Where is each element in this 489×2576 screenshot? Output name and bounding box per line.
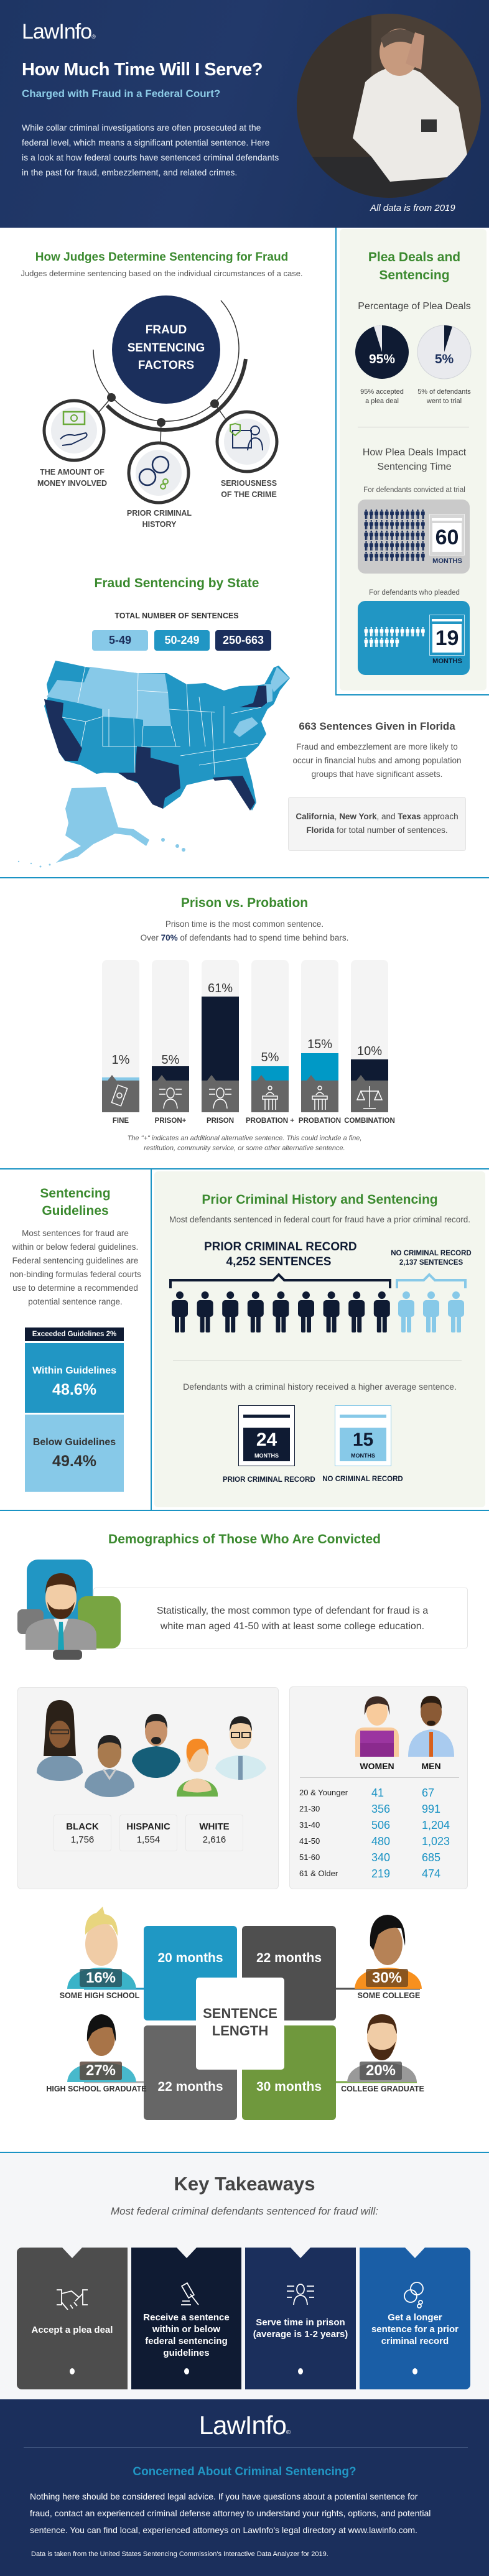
- section: fraud sentencing by state: TOTAL NUMBER OF SENTENCES: [114, 611, 239, 620]
- sentence length by education: 30 months: [256, 2080, 322, 2094]
- card: within guidelines: guidelines: [163, 2348, 210, 2358]
- footnote: restitution, community service, or some other alternative sentence.: [144, 1145, 345, 1152]
- panel: plea deals: For defendants convicted at trial: [363, 486, 465, 494]
- age table: 67: [422, 1787, 434, 1799]
- footer paragraph: sentence. You can find local, experienced attorneys on LawInfo's legal directory at www.lawinfo.com.: [30, 2525, 417, 2535]
- race stat boxes: 1,756: [71, 1834, 94, 1845]
- people pictogram: [169, 1273, 467, 1332]
- pie captions: a plea deal: [365, 398, 399, 405]
- heading: Plea Deals and: [368, 250, 460, 264]
- no record label: NO CRIMINAL RECORD: [391, 1250, 472, 1257]
- card: serve time: Serve time in prison: [256, 2317, 345, 2328]
- panel: race: 1,554: [137, 1834, 160, 1845]
- pie charts: [355, 325, 472, 379]
- race stat boxes: BLACK: [66, 1821, 99, 1832]
- heading: Prison vs. Probation: [181, 896, 308, 910]
- icon: seriousness: [217, 412, 277, 472]
- icon blocks: [102, 1075, 388, 1112]
- age table: 356: [371, 1803, 390, 1815]
- calendar: 24 months: [238, 1405, 295, 1466]
- age table: 480: [371, 1835, 390, 1848]
- age table: 685: [422, 1851, 440, 1864]
- intro paragraph: in the past for fraud, embezzlement, and related crimes.: [22, 167, 237, 177]
- bar chart: PRISON+: [155, 1117, 186, 1125]
- gender avatars: [355, 1696, 454, 1757]
- bar: probation: [301, 960, 338, 1112]
- section: prison vs probation: Over 70% of defendants had to spend time behind bars.: [141, 933, 348, 942]
- legend: [92, 630, 148, 651]
- label: money: THE AMOUNT OF: [40, 468, 105, 477]
- section: prison vs probation: [102, 896, 395, 1152]
- stacked guideline bar: Exceeded Guidelines 2%: [32, 1331, 116, 1338]
- bar: probation+: 5%: [261, 1051, 279, 1064]
- heading: [40, 1186, 111, 1218]
- age table: 219: [371, 1867, 390, 1880]
- subtitle: Charged with Fraud in a Federal Court?: [22, 88, 220, 100]
- card: within guidelines: within or below: [152, 2324, 220, 2335]
- panel: race: 2,616: [203, 1834, 226, 1845]
- bar chart: PROBATION: [299, 1117, 341, 1125]
- age table: 1,204: [422, 1819, 450, 1831]
- section: fraud sentencing by state: 50-249: [164, 634, 200, 646]
- pie charts: 5%: [435, 352, 454, 366]
- heading: Guidelines: [42, 1204, 109, 1218]
- section: fraud sentencing by state: occur in financial hubs and among population: [293, 756, 461, 765]
- note box: California, New York, and Texas approach: [296, 812, 459, 821]
- panel: prior criminal history: Most defendants sentenced in federal court for fraud have a prior criminal record.: [169, 1215, 470, 1224]
- subheading: Judges determine sentencing based on the individual circumstances of a case.: [21, 269, 303, 278]
- panel: prior criminal history: Defendants with a criminal history received a higher average sentence.: [183, 1382, 457, 1392]
- pie charts: 95%: [369, 352, 395, 366]
- card: within guidelines: Receive a sentence: [143, 2312, 230, 2323]
- age table: 31-40: [299, 1820, 320, 1830]
- callout box: [93, 1588, 468, 1648]
- photo circle: [297, 14, 481, 198]
- bar: prison: [202, 960, 239, 1112]
- section: key takeaways: [0, 2152, 489, 2399]
- panel: sentencing guidelines: Most sentences for fraud are: [22, 1229, 129, 1238]
- bar: combination: [351, 960, 388, 1112]
- section: fraud sentencing by state: Fraud and embezzlement are more likely to: [296, 742, 458, 751]
- badges: [80, 1969, 122, 1987]
- footer paragraph: Nothing here should be considered legal advice. If you have questions about a potential sentence for: [30, 2491, 417, 2501]
- heading: Sentencing: [379, 268, 450, 282]
- bar: fine: [102, 960, 139, 1112]
- card: longer sentence: criminal record: [381, 2336, 449, 2346]
- panel: sentencing guidelines: [9, 1186, 141, 1492]
- footnote: [128, 1135, 361, 1152]
- section: how judges determine sentencing: [21, 251, 303, 529]
- section: fraud sentencing by state: groups that have significant assets.: [312, 770, 442, 779]
- panel: plea deals: 5% of defendants: [417, 388, 471, 396]
- no record label: [391, 1250, 472, 1267]
- stacked guideline bar: 49.4%: [52, 1453, 96, 1470]
- label: money: MONEY INVOLVED: [37, 479, 107, 488]
- icon: handcuffs: [129, 443, 189, 503]
- bar: fine: 1%: [112, 1053, 129, 1067]
- panel: sentencing guidelines: within or below federal guidelines.: [12, 1242, 138, 1252]
- plea box: MONTHS: [432, 658, 462, 665]
- card: serve time: (average is 1-2 years): [253, 2329, 348, 2340]
- panel: prior criminal history: NO CRIMINAL RECORD: [322, 1476, 403, 1483]
- calendar: 15 months: 15: [353, 1430, 373, 1450]
- footer logo: LawInfo®: [199, 2411, 290, 2440]
- sentence length by education: [46, 1907, 424, 2120]
- label: seriousness: OF THE CRIME: [221, 490, 277, 499]
- sentence length by education: 22 months: [157, 2080, 223, 2094]
- panel: age and gender table: [289, 1686, 468, 1889]
- label: seriousness: SERIOUSNESS: [221, 479, 277, 488]
- age table: 21-30: [299, 1804, 320, 1813]
- age table: 991: [422, 1803, 440, 1815]
- bar: probation: 15%: [307, 1038, 332, 1051]
- label: seriousness: [221, 479, 277, 499]
- section: demographics: white man aged 41-50 with at least some college education.: [161, 1621, 424, 1632]
- florida callout: 663 Sentences Given in Florida: [299, 720, 455, 732]
- panel: sentencing guidelines: non-binding formulas federal courts: [9, 1270, 141, 1279]
- panel: age and gender table: MEN: [421, 1761, 441, 1771]
- footer heading: Concerned About Criminal Sentencing?: [133, 2465, 356, 2478]
- stacked guideline bar: 48.6%: [52, 1381, 96, 1398]
- panel: race: [17, 1687, 279, 1889]
- age table: 41: [371, 1787, 384, 1799]
- calendar: 24 months: 24: [256, 1430, 277, 1450]
- pie captions: 95% accepted: [360, 388, 404, 396]
- age table: 41-50: [299, 1836, 320, 1846]
- sentence length by education: 30%: [372, 1969, 402, 1986]
- intro paragraph: is a look at how federal courts have sentenced criminal defendants: [22, 152, 279, 162]
- sentence length by education: HIGH SCHOOL GRADUATE: [46, 2085, 147, 2093]
- age table: 61 & Older: [299, 1869, 338, 1878]
- card: plea deal: [17, 2248, 128, 2389]
- age table: 20 & Younger: [299, 1788, 348, 1797]
- bar chart: PROBATION +: [246, 1117, 294, 1125]
- footnote: The "+" indicates an additional alternative sentence. This could include a fine,: [128, 1135, 361, 1142]
- intro paragraph: [22, 123, 279, 177]
- stacked guideline bar: Within Guidelines: [32, 1365, 116, 1376]
- card: longer sentence: Get a longer: [388, 2312, 442, 2323]
- age table: 340: [371, 1851, 390, 1864]
- calendar 19: [429, 615, 465, 656]
- panel: sentencing guidelines: use to determine a recommended: [12, 1283, 138, 1293]
- trial box: MONTHS: [432, 557, 462, 565]
- no record label: 2,137 SENTENCES: [399, 1259, 463, 1267]
- note box: Florida for total number of sentences.: [306, 825, 448, 835]
- bar: prison+: 5%: [162, 1053, 179, 1067]
- footer paragraph: fraud, contact an experienced criminal defense attorney to understand your rights, options, and potential: [30, 2508, 431, 2518]
- label: prior history: HISTORY: [142, 520, 176, 529]
- heading: Fraud Sentencing by State: [95, 576, 259, 590]
- sentence length by education: SOME COLLEGE: [358, 1991, 420, 2000]
- center label: [196, 1978, 284, 2070]
- section: fraud sentencing by state: [17, 576, 466, 867]
- intro paragraph: federal level, which means a significant potential sentence. Here: [22, 137, 269, 147]
- label: prior history: [127, 509, 192, 529]
- panel: plea deals: [335, 228, 489, 695]
- stacked guideline bar: Below Guidelines: [33, 1437, 116, 1448]
- subheading: percentage: Percentage of Plea Deals: [358, 301, 471, 312]
- legend: 5-49: [109, 634, 131, 646]
- prior record label: 4,252 SENTENCES: [226, 1255, 331, 1268]
- bar chart: COMBINATION: [344, 1117, 395, 1125]
- card: longer sentence: sentence for a prior: [371, 2324, 459, 2335]
- sentence length by education: COLLEGE GRADUATE: [341, 2085, 424, 2093]
- panel: prior criminal history: PRIOR CRIMINAL RECORD: [223, 1476, 315, 1484]
- pie captions: [360, 388, 404, 405]
- data note: All data is from 2019: [370, 203, 455, 213]
- age table: 1,023: [422, 1835, 450, 1848]
- title: How Much Time Will I Serve?: [22, 60, 263, 80]
- calendar 19: 19: [435, 626, 459, 650]
- panel: prior criminal history: [154, 1171, 485, 1507]
- race avatars: [37, 1700, 266, 1797]
- section: demographics: Statistically, the most common type of defendant for fraud is a: [157, 1606, 428, 1616]
- heading: Key Takeaways: [174, 2173, 315, 2195]
- calendar 60: [429, 514, 465, 556]
- footer paragraph: [30, 2491, 431, 2535]
- age table: 51-60: [299, 1853, 320, 1862]
- prior record label: [204, 1240, 357, 1268]
- section: key takeaways: Most federal criminal defendants sentenced for fraud will:: [111, 2205, 378, 2217]
- bar: combination: 10%: [357, 1044, 382, 1058]
- intro paragraph: While collar criminal investigations are often prosecuted at the: [22, 123, 261, 133]
- card: plea deal: Accept a plea deal: [32, 2325, 113, 2335]
- trial box: [358, 500, 470, 574]
- subheading: impact: How Plea Deals Impact: [363, 447, 466, 458]
- takeaway cards: [17, 2248, 470, 2389]
- heading: [368, 250, 460, 282]
- icon: money: [44, 401, 104, 460]
- center label: LENGTH: [212, 2023, 268, 2039]
- heading: Sentencing: [40, 1186, 111, 1201]
- plea box: [358, 601, 470, 675]
- stacked guideline bar: [25, 1328, 124, 1492]
- factors diagram: SENTENCING: [128, 342, 205, 355]
- education labels: SOME HIGH SCHOOL: [60, 1991, 139, 2000]
- heading: Demographics of Those Who Are Convicted: [108, 1532, 381, 1546]
- badges: 16%: [86, 1969, 116, 1986]
- note box: [288, 797, 466, 851]
- age table: 506: [371, 1819, 390, 1831]
- card: within guidelines: [131, 2248, 241, 2389]
- bar: probation+: [251, 960, 289, 1112]
- icon: typical defendant avatar: [17, 1560, 121, 1660]
- data source: Data is taken from the United States Sentencing Commission's Interactive Data Analyzer for 2019.: [31, 2550, 328, 2558]
- sentence length by education: 27%: [86, 2062, 116, 2079]
- heading: Prior Criminal History and Sentencing: [202, 1193, 438, 1207]
- avatars: [67, 1907, 422, 2083]
- panel: race: HISPANIC: [126, 1821, 170, 1832]
- header: [0, 0, 489, 228]
- panel: plea deals: went to trial: [427, 398, 462, 405]
- section: demographics: [17, 1532, 468, 1660]
- calendar: 24 months: MONTHS: [254, 1453, 279, 1459]
- logo: LawInfo®: [22, 20, 95, 44]
- age table: 474: [422, 1867, 440, 1880]
- US map: [17, 661, 290, 867]
- card: within guidelines: federal sentencing: [145, 2336, 228, 2346]
- sentence length by education: 20 months: [157, 1951, 223, 1965]
- calendar: 15 months: [335, 1405, 391, 1466]
- subheading: impact: [363, 447, 467, 472]
- factors diagram: FACTORS: [138, 359, 194, 372]
- panel: age and gender table: WOMEN: [360, 1761, 394, 1771]
- panel: sentencing guidelines: Federal sentencing guidelines are: [12, 1256, 138, 1265]
- calendar 60: 60: [435, 526, 459, 549]
- bar: prison: 61%: [208, 982, 233, 995]
- panel: sentencing guidelines: potential sentence range.: [28, 1297, 123, 1306]
- section: prison vs probation: Prison time is the most common sentence.: [165, 919, 324, 929]
- bar: prison+: [152, 960, 189, 1112]
- bar labels: FINE: [113, 1117, 129, 1125]
- card: longer sentence: [360, 2248, 470, 2389]
- race stat boxes: [54, 1815, 111, 1851]
- factors diagram: FRAUD: [146, 323, 187, 337]
- panel: race: WHITE: [199, 1821, 230, 1832]
- quadrant boxes: [144, 1926, 237, 2020]
- sentence length by education: 20%: [366, 2062, 396, 2079]
- label: prior history: PRIOR CRIMINAL: [127, 509, 192, 518]
- bar chart: PRISON: [207, 1117, 234, 1125]
- factors diagram: [42, 295, 279, 504]
- bar chart: [102, 960, 395, 1125]
- center label: SENTENCE: [203, 2006, 277, 2021]
- calendar: 15 months: MONTHS: [351, 1453, 375, 1459]
- age table: [299, 1787, 450, 1880]
- panel: plea deals: For defendants who pleaded: [369, 589, 460, 597]
- footer: [0, 2399, 489, 2576]
- section: fraud sentencing by state: 250-663: [223, 634, 264, 646]
- prior record label: PRIOR CRIMINAL RECORD: [204, 1240, 357, 1253]
- subheading: impact: Sentencing Time: [377, 462, 452, 472]
- sentence length by education: 22 months: [256, 1951, 322, 1965]
- heading: How Judges Determine Sentencing for Fraud: [35, 251, 288, 264]
- card: serve time: [245, 2248, 356, 2389]
- label: money: [37, 468, 107, 488]
